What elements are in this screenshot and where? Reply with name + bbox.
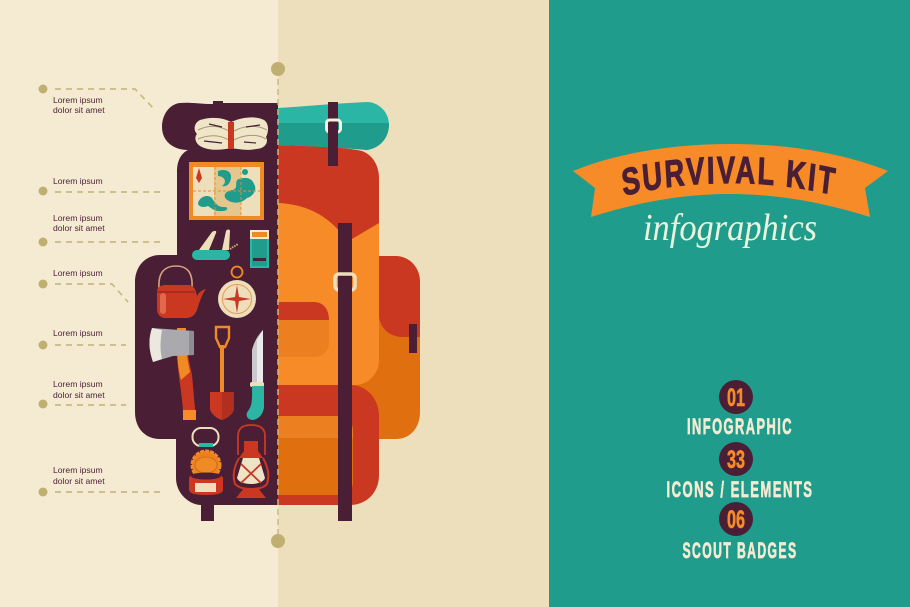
label 7: can (38, 465, 164, 496)
label 6: shovel: dolor sit amet (53, 390, 105, 400)
icon: rope (195, 117, 268, 150)
icon: tin can (189, 451, 223, 495)
label 2: map: Lorem ipsum (53, 176, 103, 186)
sleeping roll (278, 102, 389, 150)
main body red top (278, 145, 379, 240)
subtitle: infographics: infographics (643, 207, 817, 249)
label 2: map (38, 176, 162, 196)
stat: 33 icons (666, 442, 814, 502)
stat: 06 badges (682, 502, 798, 563)
label 6: shovel: Lorem ipsum (53, 379, 103, 389)
icon: compass (218, 266, 256, 318)
icon: pocket knife (192, 230, 238, 260)
background panel: left half (0, 0, 278, 607)
top strap and buckle (326, 102, 340, 166)
background panel: right half (278, 0, 549, 607)
stat: 06 badges: 06 (727, 506, 745, 534)
label 3: knife: dolor sit amet (53, 223, 105, 233)
label 7: can: dolor sit amet (53, 476, 105, 486)
stat: 01 infographic: INFOGRAPHIC (687, 414, 793, 439)
label 6: shovel (38, 379, 126, 408)
label 1: rope: Lorem ipsum (53, 95, 103, 105)
stat: 33 icons: 33 (727, 446, 745, 474)
icon: carabiner (192, 428, 218, 447)
ribbon banner (573, 144, 888, 217)
label 7: can: Lorem ipsum (53, 465, 103, 475)
icon: shovel (210, 327, 234, 420)
long strap and buckle (335, 223, 355, 521)
icon: lantern (234, 425, 268, 498)
background panel: teal title side (549, 0, 910, 607)
icon: map (189, 162, 264, 220)
backpack colored side (278, 102, 420, 521)
center dashed axis with end dots (271, 62, 285, 548)
stat: 01 infographic: 01 (727, 384, 745, 412)
stat: 33 icons: ICONS / ELEMENTS (666, 477, 814, 502)
label 3: knife: Lorem ipsum (53, 213, 103, 223)
stat: 06 badges: SCOUT BADGES (682, 538, 798, 563)
label 3: knife (38, 213, 162, 246)
label 4: kettle: Lorem ipsum (53, 268, 103, 278)
label 5: axe: Lorem ipsum (53, 328, 103, 338)
label 1: rope: dolor sit amet (53, 105, 105, 115)
label 1: rope (38, 84, 155, 115)
title: survival kit: SURVIVAL KIT (622, 156, 836, 195)
front flap pocket (278, 302, 329, 357)
lower pocket (278, 385, 379, 505)
label 5: axe (38, 328, 126, 350)
icon: kettle (157, 266, 206, 318)
icon: hunting knife (247, 330, 264, 420)
stat: 01 infographic (687, 380, 793, 439)
label 4: kettle (38, 268, 128, 302)
title: survival kit (622, 156, 836, 195)
backpack dark silhouette (contents side) (135, 101, 278, 521)
icon: axe (149, 328, 196, 420)
main body orange (278, 203, 379, 385)
icon: matchbox (250, 230, 269, 268)
side pocket (340, 256, 420, 439)
